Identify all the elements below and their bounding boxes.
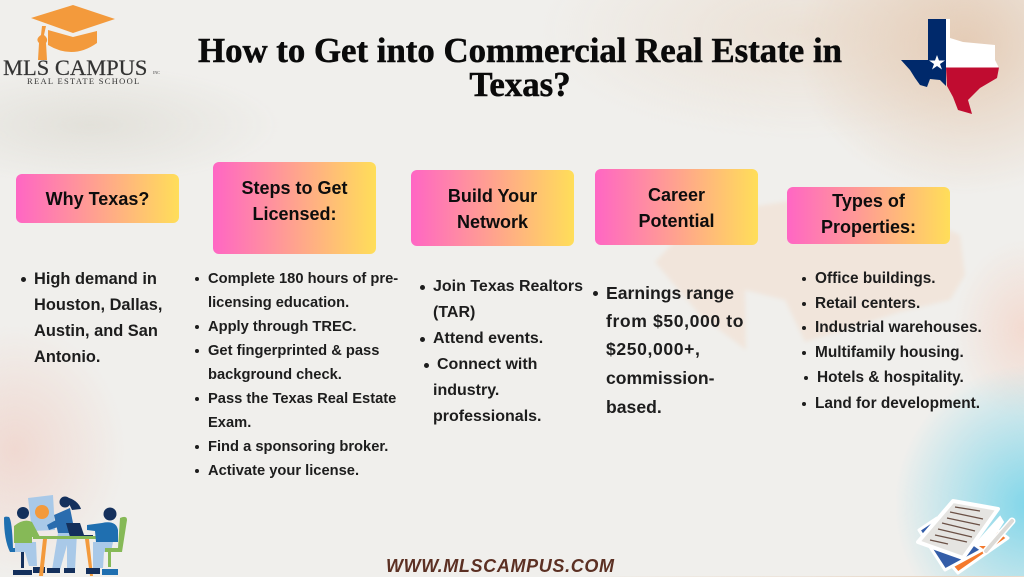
list: Network (420, 278, 583, 425)
list: Why Texas (21, 270, 162, 366)
panel: Steps to Get Licensed (213, 162, 376, 254)
text: Austin, and San (34, 322, 158, 340)
icon: graduation cap (31, 5, 115, 60)
text: Attend events. (433, 330, 543, 347)
text: High demand in (34, 270, 157, 288)
list: Career (593, 283, 744, 417)
text: licensing education. (208, 295, 349, 311)
text: Industrial warehouses. (815, 319, 982, 336)
logo suffix: INC (153, 70, 160, 75)
list: Steps (195, 271, 398, 479)
text: commission- (606, 368, 715, 388)
panel: Steps to Get Licensed: Steps to Get (241, 178, 348, 198)
text: $250,000+, (606, 339, 701, 359)
text: Join Texas Realtors (433, 278, 583, 295)
text: Apply through TREC. (208, 319, 356, 335)
panel: Types of Properties (787, 187, 950, 244)
panel: Why Texas? (16, 174, 179, 223)
text: Find a sponsoring broker. (208, 439, 388, 455)
panel: Build Your Network: Build Your (448, 186, 537, 206)
text: (TAR) (433, 304, 475, 321)
panel: Types of Properties: Types of (832, 191, 905, 211)
logo: MLS Campus (3, 5, 160, 86)
website url: WWW.MLSCAMPUS.COM (386, 556, 615, 576)
text: Office buildings. (815, 270, 936, 287)
panel: Steps to Get Licensed: Licensed: (252, 204, 336, 224)
panel: Career Potential (595, 169, 758, 245)
panel: Types of Properties: Properties: (821, 216, 916, 236)
text: Antonio. (34, 348, 100, 366)
list: Properties (802, 270, 982, 412)
text: Retail centers. (815, 295, 920, 312)
illustration: team meeting (4, 495, 127, 576)
text: Complete 180 hours of pre- (208, 271, 398, 287)
panel: Why Texas?: Why Texas? (46, 189, 149, 209)
panel: Career Potential: Potential (638, 210, 714, 230)
text: Exam. (208, 415, 251, 431)
text: background check. (208, 367, 342, 383)
text: from $50,000 to (606, 311, 744, 331)
title: How to Get into Commercial Real Estate in (198, 31, 842, 70)
text: Earnings range (606, 283, 734, 303)
panel: Build Your Network: Network (457, 212, 528, 232)
illustration: documents and pen (916, 499, 1016, 574)
title (198, 31, 842, 104)
text: Connect with (437, 356, 537, 373)
text: Multifamily housing. (815, 344, 964, 361)
text: industry. (433, 382, 499, 399)
text: Get fingerprinted & pass (208, 343, 379, 359)
text: Activate your license. (208, 463, 359, 479)
text: Land for development. (815, 395, 980, 412)
text: professionals. (433, 408, 541, 425)
text: Hotels & hospitality. (817, 369, 964, 386)
panel: Career Potential: Career (648, 185, 705, 205)
text: Pass the Texas Real Estate (208, 391, 396, 407)
panel: Build Your Network (411, 170, 574, 246)
text: Houston, Dallas, (34, 296, 162, 314)
logo tagline: REAL ESTATE SCHOOL (27, 76, 141, 86)
text: based. (606, 397, 662, 417)
logo wordmark: MLS CAMPUS (3, 55, 147, 80)
icon: Texas flag map (901, 19, 999, 114)
title: Texas? (469, 65, 571, 104)
